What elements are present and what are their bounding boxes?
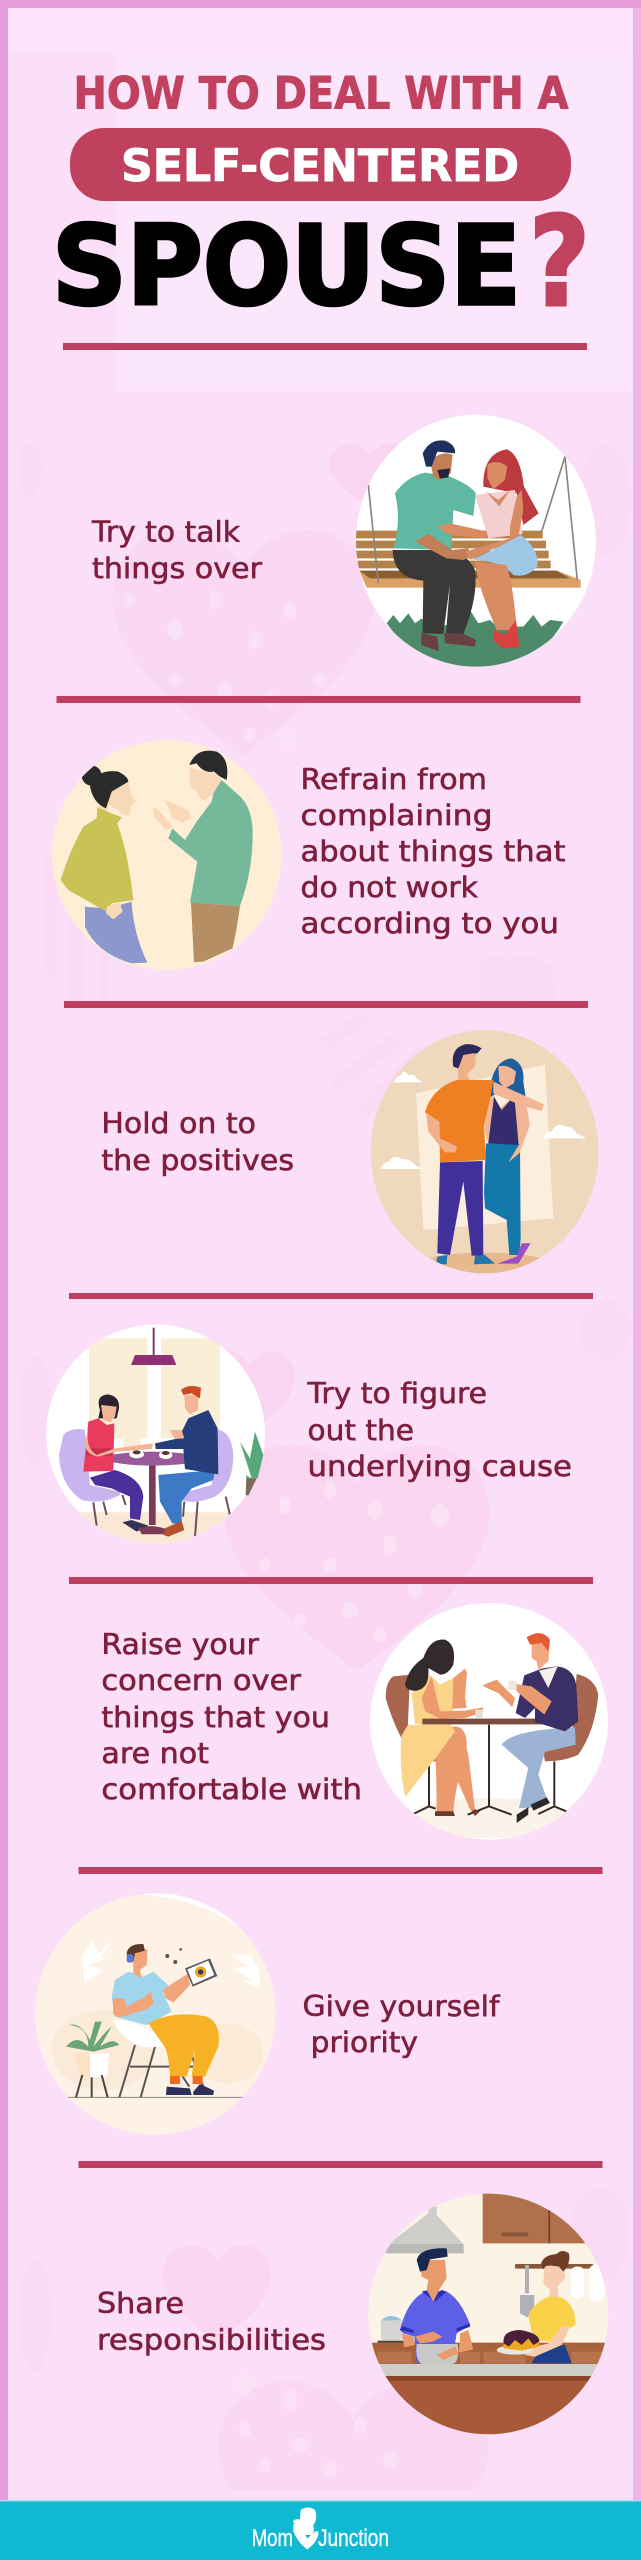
step 5 text: things that you xyxy=(101,1701,330,1734)
illustration: couple arguing xyxy=(52,740,282,970)
step 6 text: priority xyxy=(311,2026,418,2059)
step 4 text: Try to figure xyxy=(306,1377,487,1410)
step 2 text xyxy=(300,763,566,940)
step 7 text xyxy=(97,2287,326,2356)
step 6 text xyxy=(302,1990,501,2059)
step 2 text: according to you xyxy=(300,907,559,940)
step 7 text: Share xyxy=(97,2287,184,2320)
step 4 text xyxy=(306,1377,572,1483)
step 5 text: Raise your xyxy=(101,1628,259,1661)
illustration: couple in the kitchen xyxy=(365,2193,612,2436)
step 5 text: concern over xyxy=(101,1664,301,1697)
title line 1: HOW TO DEAL WITH A xyxy=(74,68,569,120)
MomJunction logo: Mom xyxy=(252,2525,293,2552)
illustration: couple talking over coffee xyxy=(370,1603,608,1840)
step 7 text: responsibilities xyxy=(97,2324,326,2356)
MomJunction logo: Junction xyxy=(318,2525,389,2552)
logo icon: mother and child heart xyxy=(293,2507,319,2549)
title line 3: SPOUSE xyxy=(52,202,521,330)
footer bar xyxy=(0,2500,641,2560)
illustration: couple on a swing bench xyxy=(350,415,596,670)
step 1 text xyxy=(91,516,262,585)
step 4 text: underlying cause xyxy=(308,1450,572,1483)
step 5 text: comfortable with xyxy=(101,1773,362,1806)
step 6 text: Give yourself xyxy=(302,1990,501,2023)
illustration: man relaxing with a tablet and music xyxy=(35,1890,276,2135)
MomJunction logo xyxy=(252,2507,389,2552)
illustration: couple at a cafe table xyxy=(46,1325,265,1546)
step 3 text: Hold on to xyxy=(101,1107,256,1140)
question mark: ? xyxy=(529,191,590,335)
step 1 text: Try to talk xyxy=(91,516,241,548)
title pill: SELF-CENTERED xyxy=(121,141,519,192)
step 3 text: the positives xyxy=(101,1144,294,1177)
step 2 text: complaining xyxy=(300,799,492,832)
step 2 text: Refrain from xyxy=(300,763,487,796)
step 1 text: things over xyxy=(92,552,262,585)
divider lines xyxy=(56,343,602,2168)
step 3 text xyxy=(101,1107,294,1177)
step 2 text: do not work xyxy=(300,871,479,904)
title xyxy=(52,68,590,335)
title pill xyxy=(70,128,571,201)
step 5 text xyxy=(101,1628,362,1806)
illustration: happy couple standing xyxy=(371,1030,599,1274)
step 2 text: about things that xyxy=(300,835,566,868)
step 5 text: are not xyxy=(101,1737,209,1770)
step 4 text: out the xyxy=(308,1414,414,1447)
